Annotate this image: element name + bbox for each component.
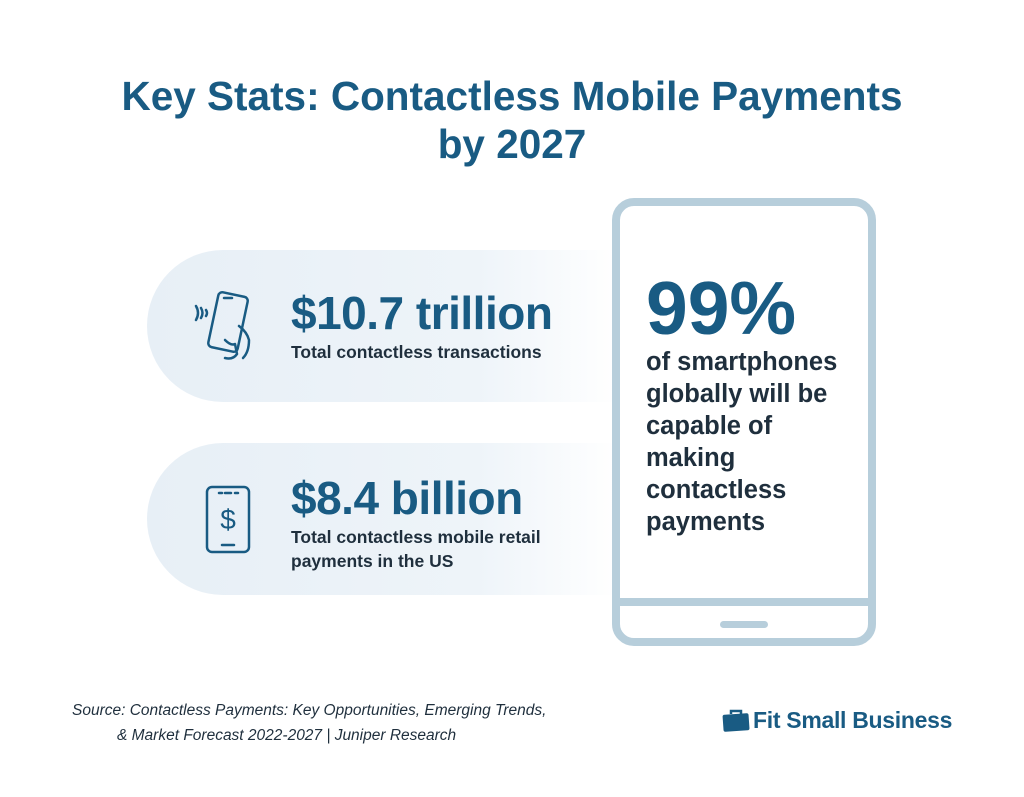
divider bar bbox=[620, 598, 868, 606]
stat 99%: making bbox=[646, 444, 735, 472]
phone frame with 99% stat bbox=[612, 198, 876, 646]
icon: phone dollar bbox=[206, 486, 250, 554]
stat 99%: globally will be bbox=[646, 380, 827, 408]
source text: Source: Contactless Payments: Key Opportunities, Emerging Trends, bbox=[72, 702, 546, 719]
title: Key Stats: Contactless Mobile Payments bbox=[122, 73, 902, 119]
stat 99%: 99% bbox=[646, 266, 796, 350]
stat 99%: contactless bbox=[646, 476, 786, 504]
title: by 2027 bbox=[438, 121, 586, 167]
stat text: Total contactless mobile retail bbox=[291, 527, 541, 547]
logo: Fit Small Business bbox=[753, 707, 952, 733]
stat 99% bbox=[646, 266, 837, 536]
icon: phone tap bbox=[194, 291, 250, 360]
stat text bbox=[291, 472, 541, 571]
home button bbox=[720, 621, 768, 628]
stat text: payments in the US bbox=[291, 551, 453, 571]
stat text bbox=[291, 287, 552, 362]
source text bbox=[72, 702, 546, 744]
panel: billion stat bbox=[147, 443, 617, 595]
stat text: Total contactless transactions bbox=[291, 342, 542, 362]
panel: trillion stat bbox=[147, 250, 617, 402]
icon: briefcase bbox=[722, 710, 750, 732]
icon: phone dollar: $ bbox=[220, 504, 236, 535]
title bbox=[122, 73, 902, 167]
stat text: $10.7 trillion bbox=[291, 287, 552, 339]
stat 99%: capable of bbox=[646, 412, 772, 440]
source text: & Market Forecast 2022-2027 | Juniper Research bbox=[117, 727, 456, 744]
stat text: $8.4 billion bbox=[291, 472, 523, 524]
stat 99%: payments bbox=[646, 508, 765, 536]
stat 99%: of smartphones bbox=[646, 348, 837, 376]
